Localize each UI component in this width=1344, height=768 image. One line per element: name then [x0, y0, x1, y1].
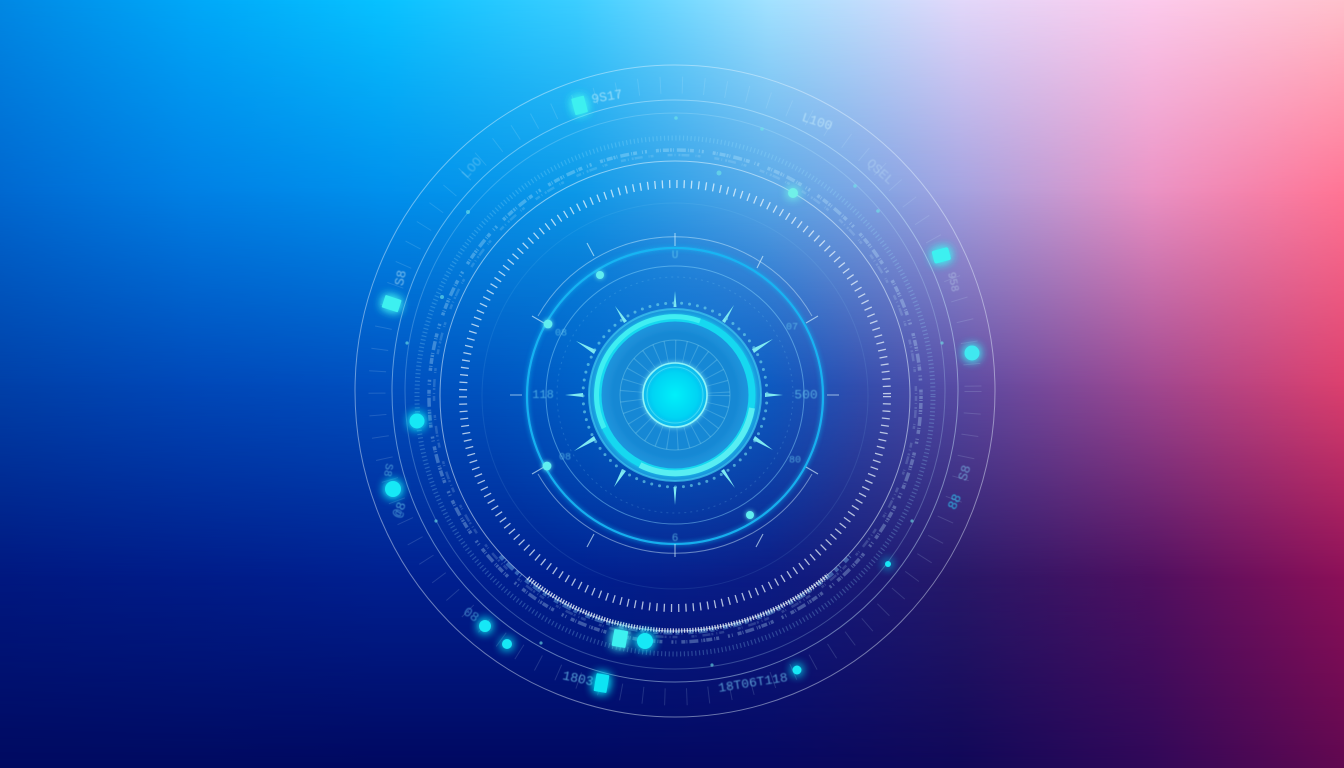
dial labels: 118	[532, 388, 554, 402]
dial labels: 07	[786, 323, 798, 334]
dial dots	[543, 271, 754, 519]
dial tick marks	[510, 233, 839, 557]
outer ring readouts: 958	[944, 271, 960, 293]
outer ring readouts: S8	[380, 462, 394, 477]
outer markers: squares	[382, 95, 951, 693]
dial labels: 08	[555, 329, 567, 340]
dial labels: 08	[559, 453, 571, 464]
outer ring readouts: L100	[800, 110, 834, 134]
dial labels: U	[672, 250, 678, 262]
outer ring readouts: 18T06T118	[717, 670, 789, 696]
outer ring readouts: QSEL	[863, 156, 897, 188]
dial labels: 6	[672, 533, 678, 545]
central gauge	[589, 309, 761, 481]
sunburst spikes	[565, 291, 783, 505]
dial labels: 80	[789, 456, 801, 467]
outer ring readouts: @8	[390, 500, 410, 520]
outer ring readouts: LOO	[459, 154, 485, 182]
outer ring readouts: S8	[392, 269, 410, 287]
outer markers: dots	[385, 188, 980, 674]
dial rings	[527, 237, 823, 553]
outer ring readouts: 08	[460, 604, 482, 626]
centre halo	[485, 205, 865, 585]
outer rings and tick bands	[355, 65, 995, 717]
dial labels	[532, 250, 818, 545]
small nodes	[405, 116, 944, 667]
outer ring readouts: 9S17	[590, 87, 624, 107]
outer ring readouts: 88	[945, 492, 965, 512]
bead ring	[583, 303, 767, 487]
outer ring readouts	[380, 87, 974, 696]
dial labels: 500	[794, 387, 818, 402]
outer ring readouts: 1803	[561, 668, 595, 690]
outer ring readouts: S8	[955, 463, 974, 483]
